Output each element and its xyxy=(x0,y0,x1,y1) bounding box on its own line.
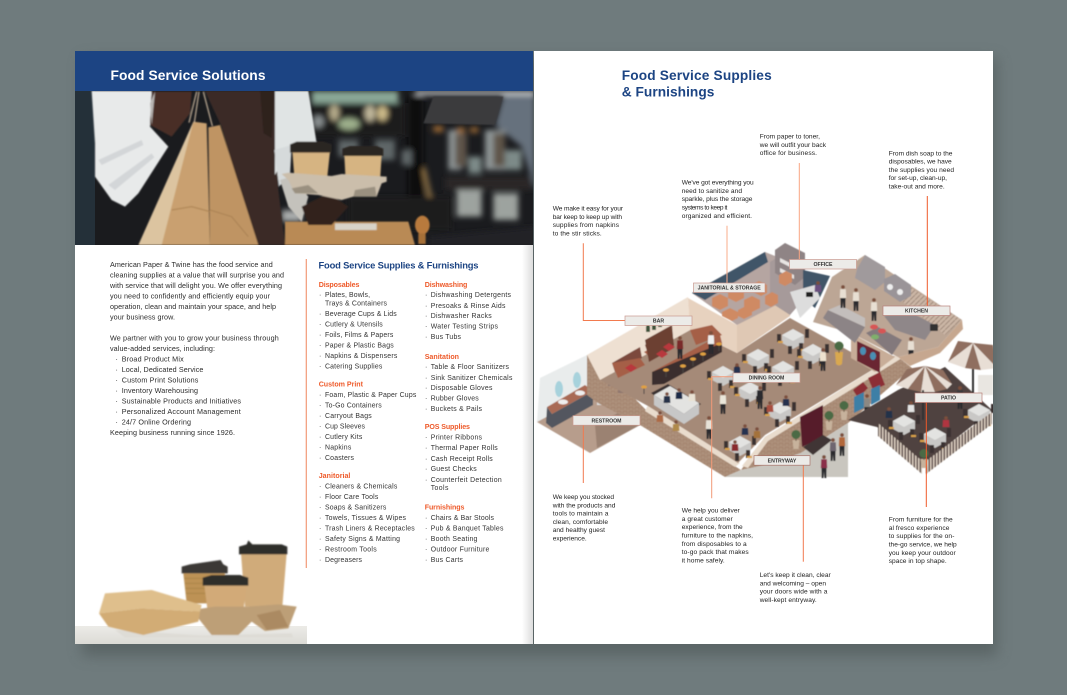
callout: kitchen: From dish soap to the xyxy=(889,150,953,157)
column: disposables, custom print, janitorial: Coasters xyxy=(325,455,355,462)
callout: kitchen: disposables, we have xyxy=(889,159,952,166)
column: dishwashing, sanitation, POS, furnishings: · xyxy=(425,466,427,473)
label: janitorial xyxy=(694,283,765,292)
column: disposables, custom print, janitorial: · xyxy=(319,515,321,522)
column: dishwashing, sanitation, POS, furnishings: Bus Carts xyxy=(431,557,464,564)
column: disposables, custom print, janitorial: · xyxy=(319,332,321,339)
column: disposables, custom print, janitorial: · xyxy=(319,402,321,410)
callout: kitchen xyxy=(889,150,954,190)
callout: patio: al fresco experience xyxy=(889,525,950,532)
intro text block: · xyxy=(116,386,118,395)
column: disposables, custom print, janitorial: · xyxy=(319,392,321,399)
column: disposables, custom print, janitorial: Degreasers xyxy=(325,557,363,564)
column: disposables, custom print, janitorial: Trays & Containers xyxy=(325,300,388,308)
callout: restroom xyxy=(552,494,616,542)
column: dishwashing, sanitation, POS, furnishings: Booth Seating xyxy=(431,536,478,543)
column: dishwashing, sanitation, POS, furnishings: Rubber Gloves xyxy=(431,396,479,402)
callout: patio: you keep your outdoor xyxy=(889,550,956,557)
front brick walls xyxy=(587,354,912,477)
column: dishwashing, sanitation, POS, furnishings: Pub & Banquet Tables xyxy=(431,526,504,532)
column: disposables, custom print, janitorial: Paper & Plastic Bags xyxy=(325,342,394,350)
callout: dining room: it home safely. xyxy=(682,557,725,564)
callout: entryway: your doors wide with a xyxy=(760,589,828,596)
column: dishwashing, sanitation, POS, furnishings: Counterfeit Detection xyxy=(431,477,502,484)
column: dishwashing, sanitation, POS, furnishings: · xyxy=(425,406,427,413)
page title xyxy=(622,68,772,100)
kitchen outer wall xyxy=(898,320,963,366)
column: disposables, custom print, janitorial: · xyxy=(319,557,321,564)
callout: restroom: experience. xyxy=(553,536,587,542)
page title: & Furnishings xyxy=(622,85,715,100)
intro text block: · xyxy=(116,418,118,426)
column: disposables, custom print, janitorial: · xyxy=(319,292,321,299)
column: disposables, custom print, janitorial: · xyxy=(319,444,321,452)
column: disposables, custom print, janitorial: · xyxy=(319,353,321,360)
intro text block: 24/7 Online Ordering xyxy=(122,418,191,426)
intro text block: · xyxy=(116,354,118,364)
intro text block: American Paper & Twine has the food service and xyxy=(110,260,273,269)
kitchen xyxy=(813,255,962,360)
intro text block: with service that will delight you. We offer everything xyxy=(109,281,282,290)
dining room xyxy=(651,329,844,461)
line: kitchen xyxy=(926,196,928,306)
label: janitorial: JANITORIAL & STORAGE xyxy=(698,286,761,292)
callout: dining room: to-go pack that makes xyxy=(682,549,749,556)
column: disposables, custom print, janitorial: · xyxy=(319,536,321,543)
column: disposables, custom print, janitorial: · xyxy=(319,546,321,554)
intro text block: Personalized Account Management xyxy=(122,407,241,416)
column: dishwashing, sanitation, POS, furnishings: Thermal Paper Rolls xyxy=(431,445,498,452)
callout: janitorial: systems to keep it xyxy=(682,204,728,212)
column: disposables, custom print, janitorial: Plates, Bowls, xyxy=(325,292,370,299)
callout: janitorial: We've got everything you xyxy=(682,180,754,187)
intro text block: Keeping business running since 1926. xyxy=(110,428,235,437)
column: disposables, custom print, janitorial: Janitorial xyxy=(319,472,350,480)
photo: server holding paper bags and coffee xyxy=(75,90,535,247)
column: dishwashing, sanitation, POS, furnishings: Water Testing Strips xyxy=(431,324,499,330)
intro text block: you need to confidently and efficiently equip your xyxy=(110,292,271,300)
leader lines xyxy=(583,163,927,562)
column: disposables, custom print, janitorial: · xyxy=(319,342,321,350)
intro text block: We partner with you to grow your business through xyxy=(110,334,279,342)
label: kitchen xyxy=(883,306,950,316)
column: dishwashing, sanitation, POS, furnishings: · xyxy=(425,375,427,382)
header band xyxy=(75,51,533,91)
line: janitorial xyxy=(726,226,728,283)
callout: entryway xyxy=(759,572,831,604)
supplies list panel xyxy=(318,260,513,564)
column: dishwashing, sanitation, POS, furnishings: · xyxy=(425,292,427,299)
callout: kitchen: take-out and more. xyxy=(889,184,945,190)
callout: bar xyxy=(553,206,624,238)
column: dishwashing, sanitation, POS, furnishings: · xyxy=(425,334,427,341)
column: disposables, custom print, janitorial: · xyxy=(319,434,321,441)
column: disposables, custom print, janitorial: Restroom Tools xyxy=(325,546,377,554)
column: disposables, custom print, janitorial: Safety Signs & Matting xyxy=(325,536,400,543)
column: disposables, custom print, janitorial: Custom Print xyxy=(319,380,364,388)
column: dishwashing, sanitation, POS, furnishings: Cash Receipt Rolls xyxy=(431,456,493,463)
column: dishwashing, sanitation, POS, furnishings: Tools xyxy=(431,485,449,492)
column: disposables, custom print, janitorial: Disposables xyxy=(319,281,359,289)
intro text block: · xyxy=(116,407,118,416)
entryway xyxy=(725,372,885,478)
column: disposables, custom print, janitorial: Foils, Films & Papers xyxy=(325,332,394,339)
column: dishwashing, sanitation, POS, furnishings: Presoaks & Rinse Aids xyxy=(431,303,506,310)
callout: patio: the-go service, we help xyxy=(889,542,957,548)
photo: kraft cups and takeout box xyxy=(75,540,307,644)
floor and back walls xyxy=(587,295,895,463)
column: dishwashing, sanitation, POS, furnishings: · xyxy=(425,385,427,392)
intro text block: Broad Product Mix xyxy=(122,354,184,364)
callout: restroom: with the products and xyxy=(552,502,616,509)
column: dishwashing, sanitation, POS, furnishings: · xyxy=(425,303,427,310)
column: dishwashing, sanitation, POS, furnishings: Dishwasher Racks xyxy=(431,313,492,320)
column: dishwashing, sanitation, POS, furnishings: Bus Tubs xyxy=(431,334,462,341)
callout: entryway: Let's keep it clean, clear xyxy=(760,572,831,579)
column: dishwashing, sanitation, POS, furnishings: POS Supplies xyxy=(425,423,470,431)
column: disposables, custom print, janitorial: Cup Sleeves xyxy=(325,424,366,430)
column: dishwashing, sanitation, POS, furnishings: Buckets & Pails xyxy=(431,406,483,413)
line: entryway xyxy=(802,465,804,562)
label: entryway xyxy=(754,456,810,465)
column: dishwashing, sanitation, POS, furnishings: Table & Floor Sanitizers xyxy=(431,364,510,371)
label: patio: PATIO xyxy=(941,396,956,402)
label: patio xyxy=(915,393,982,402)
column: dishwashing, sanitation, POS, furnishings: · xyxy=(425,536,427,543)
callout: restroom: We keep you stocked xyxy=(553,494,614,501)
patio xyxy=(848,341,997,474)
callout: bar: to the stir sticks. xyxy=(553,230,602,238)
column: dishwashing, sanitation, POS, furnishings: Dishwashing Detergents xyxy=(431,292,512,299)
column: dishwashing, sanitation, POS, furnishings xyxy=(425,281,513,564)
callout: janitorial: need to sanitize and xyxy=(682,188,742,195)
label: bar: BAR xyxy=(653,319,664,325)
column: disposables, custom print, janitorial: · xyxy=(319,413,321,420)
callout: dining room: We help you deliver xyxy=(682,508,740,515)
callout: bar: supplies from napkins xyxy=(553,222,620,229)
column: dishwashing, sanitation, POS, furnishings: · xyxy=(425,396,427,402)
column: disposables, custom print, janitorial: Catering Supplies xyxy=(325,364,383,370)
callout: kitchen: the supplies you need xyxy=(889,167,954,174)
column: dishwashing, sanitation, POS, furnishings: · xyxy=(425,526,427,532)
intro text block: operation, clean and maintain your space, and help xyxy=(110,302,276,311)
intro text block: · xyxy=(116,365,118,374)
line: bar xyxy=(583,243,625,320)
column: dishwashing, sanitation, POS, furnishings: · xyxy=(425,364,427,371)
column: dishwashing, sanitation, POS, furnishings: Sink Sanitizer Chemicals xyxy=(431,375,513,382)
column: disposables, custom print, janitorial: Beverage Cups & Lids xyxy=(325,311,397,318)
intro text block xyxy=(109,260,284,437)
intro text block: cleaning supplies at a value that will surprise you and xyxy=(110,270,284,280)
label: entryway: ENTRYWAY xyxy=(768,458,797,464)
isometric restaurant illustration xyxy=(537,243,997,478)
panel: right page xyxy=(534,51,997,644)
bar xyxy=(612,316,722,394)
label: bar xyxy=(625,316,692,326)
janitorial & storage xyxy=(692,252,776,326)
column: disposables, custom print, janitorial: Foam, Plastic & Paper Cups xyxy=(325,392,417,399)
callout: dining room: experience, from the xyxy=(682,524,743,531)
column: dishwashing, sanitation, POS, furnishings: · xyxy=(425,324,427,330)
intro text block: Inventory Warehousing xyxy=(122,386,198,395)
column: disposables, custom print, janitorial: · xyxy=(319,364,321,370)
callout: entryway: and welcoming – open xyxy=(760,580,826,587)
column: disposables, custom print, janitorial: · xyxy=(319,526,321,532)
label: restroom xyxy=(573,416,640,425)
callout: kitchen: for set-up, clean-up, xyxy=(889,175,947,182)
column: disposables, custom print, janitorial: Cutlery Kits xyxy=(325,434,363,441)
callout: restroom: and healthy guest xyxy=(553,527,605,534)
column: disposables, custom print, janitorial xyxy=(319,281,417,564)
column: disposables, custom print, janitorial: Trash Liners & Receptacles xyxy=(325,526,415,532)
divider xyxy=(306,259,307,568)
line: office xyxy=(798,163,800,259)
callout: janitorial: sparkle, plus the storage xyxy=(682,196,753,203)
column: disposables, custom print, janitorial: Cleaners & Chemicals xyxy=(325,484,398,490)
column: disposables, custom print, janitorial: · xyxy=(319,455,321,462)
column: disposables, custom print, janitorial: Floor Care Tools xyxy=(325,494,379,501)
callout: bar: bar keep to keep up with xyxy=(553,214,622,221)
callout: patio xyxy=(889,517,957,565)
intro text block: value-added services, including: xyxy=(110,344,215,353)
page title: Food Service Supplies xyxy=(622,68,772,83)
label: dining room xyxy=(733,373,800,382)
column: disposables, custom print, janitorial: · xyxy=(319,484,321,490)
callout: dining room: furniture to the napkins, xyxy=(682,532,753,540)
callout: patio: space in top shape. xyxy=(889,558,947,565)
callout: dining room: from disposables to a xyxy=(682,541,747,548)
column: disposables, custom print, janitorial: Towels, Tissues & Wipes xyxy=(325,515,407,522)
callout: janitorial: organized and efficient. xyxy=(682,213,752,220)
column: disposables, custom print, janitorial: Cutlery & Utensils xyxy=(325,322,383,328)
list heading: Food Service Supplies & Furnishings xyxy=(318,260,478,270)
column: dishwashing, sanitation, POS, furnishings: Dishwashing xyxy=(425,281,467,289)
column: dishwashing, sanitation, POS, furnishings: Printer Ribbons xyxy=(431,434,483,442)
column: disposables, custom print, janitorial: · xyxy=(319,424,321,430)
intro text block: Local, Dedicated Service xyxy=(122,365,203,374)
column: dishwashing, sanitation, POS, furnishings: · xyxy=(425,557,427,564)
column: dishwashing, sanitation, POS, furnishings: · xyxy=(425,313,427,320)
intro text block: · xyxy=(116,396,118,406)
column: dishwashing, sanitation, POS, furnishings: · xyxy=(425,456,427,463)
callout: office xyxy=(759,134,827,157)
panel: left page xyxy=(75,51,535,644)
callout: entryway: well-kept entryway. xyxy=(759,597,817,604)
label: restroom: RESTROOM xyxy=(592,418,621,424)
column: dishwashing, sanitation, POS, furnishings: · xyxy=(425,477,427,484)
column: disposables, custom print, janitorial: · xyxy=(319,504,321,512)
column: dishwashing, sanitation, POS, furnishings: Furnishings xyxy=(425,504,464,512)
callout: bar: We make it easy for your xyxy=(553,206,624,213)
callout: dining room xyxy=(682,508,753,564)
callout: janitorial xyxy=(682,180,754,220)
callout: restroom: tools to maintain a xyxy=(553,511,609,518)
line: dining room xyxy=(712,377,733,498)
restroom xyxy=(537,355,640,453)
line: patio xyxy=(925,402,927,507)
label: office: OFFICE xyxy=(813,262,833,268)
column: dishwashing, sanitation, POS, furnishings: · xyxy=(425,445,427,452)
column: dishwashing, sanitation, POS, furnishings: Disposable Gloves xyxy=(431,385,493,392)
column: disposables, custom print, janitorial: · xyxy=(319,494,321,501)
room labels xyxy=(573,260,982,465)
column: disposables, custom print, janitorial: Carryout Bags xyxy=(325,413,372,420)
intro text block: your business grow. xyxy=(110,312,175,322)
column: dishwashing, sanitation, POS, furnishings: Guest Checks xyxy=(431,466,477,473)
callout: restroom: clean, comfortable xyxy=(553,519,608,526)
column: disposables, custom print, janitorial: Napkins xyxy=(325,444,352,452)
label: kitchen: KITCHEN xyxy=(905,309,928,315)
line: restroom xyxy=(582,425,584,483)
column: dishwashing, sanitation, POS, furnishings: Chairs & Bar Stools xyxy=(431,515,495,522)
column: dishwashing, sanitation, POS, furnishings: Sanitation xyxy=(425,353,459,361)
callout: patio: From furniture for the xyxy=(889,517,953,524)
label: office xyxy=(790,260,856,269)
page heading: Food Service Solutions xyxy=(110,68,266,83)
column: disposables, custom print, janitorial: · xyxy=(319,311,321,318)
column: disposables, custom print, janitorial: To-Go Containers xyxy=(325,402,382,410)
label: dining room: DINING ROOM xyxy=(749,376,784,382)
column: dishwashing, sanitation, POS, furnishings: · xyxy=(425,515,427,522)
office xyxy=(765,243,830,318)
column: dishwashing, sanitation, POS, furnishings: · xyxy=(425,434,427,442)
callout: office: we will outfit your back xyxy=(759,142,827,149)
callout: dining room: a great customer xyxy=(682,516,733,523)
column: dishwashing, sanitation, POS, furnishings: Outdoor Furniture xyxy=(431,546,490,554)
column: disposables, custom print, janitorial: Napkins & Dispensers xyxy=(325,353,398,360)
column: disposables, custom print, janitorial: · xyxy=(319,322,321,328)
callout: office: office for business. xyxy=(760,150,817,157)
callout: patio: to supplies for the on- xyxy=(889,533,954,540)
intro text block: Custom Print Solutions xyxy=(122,376,199,384)
intro text block: · xyxy=(116,376,118,384)
column: dishwashing, sanitation, POS, furnishings: · xyxy=(425,546,427,554)
callout: office: From paper to toner, xyxy=(760,134,820,141)
column: disposables, custom print, janitorial: Soaps & Sanitizers xyxy=(325,504,387,512)
intro text block: Sustainable Products and Initiatives xyxy=(122,396,241,406)
